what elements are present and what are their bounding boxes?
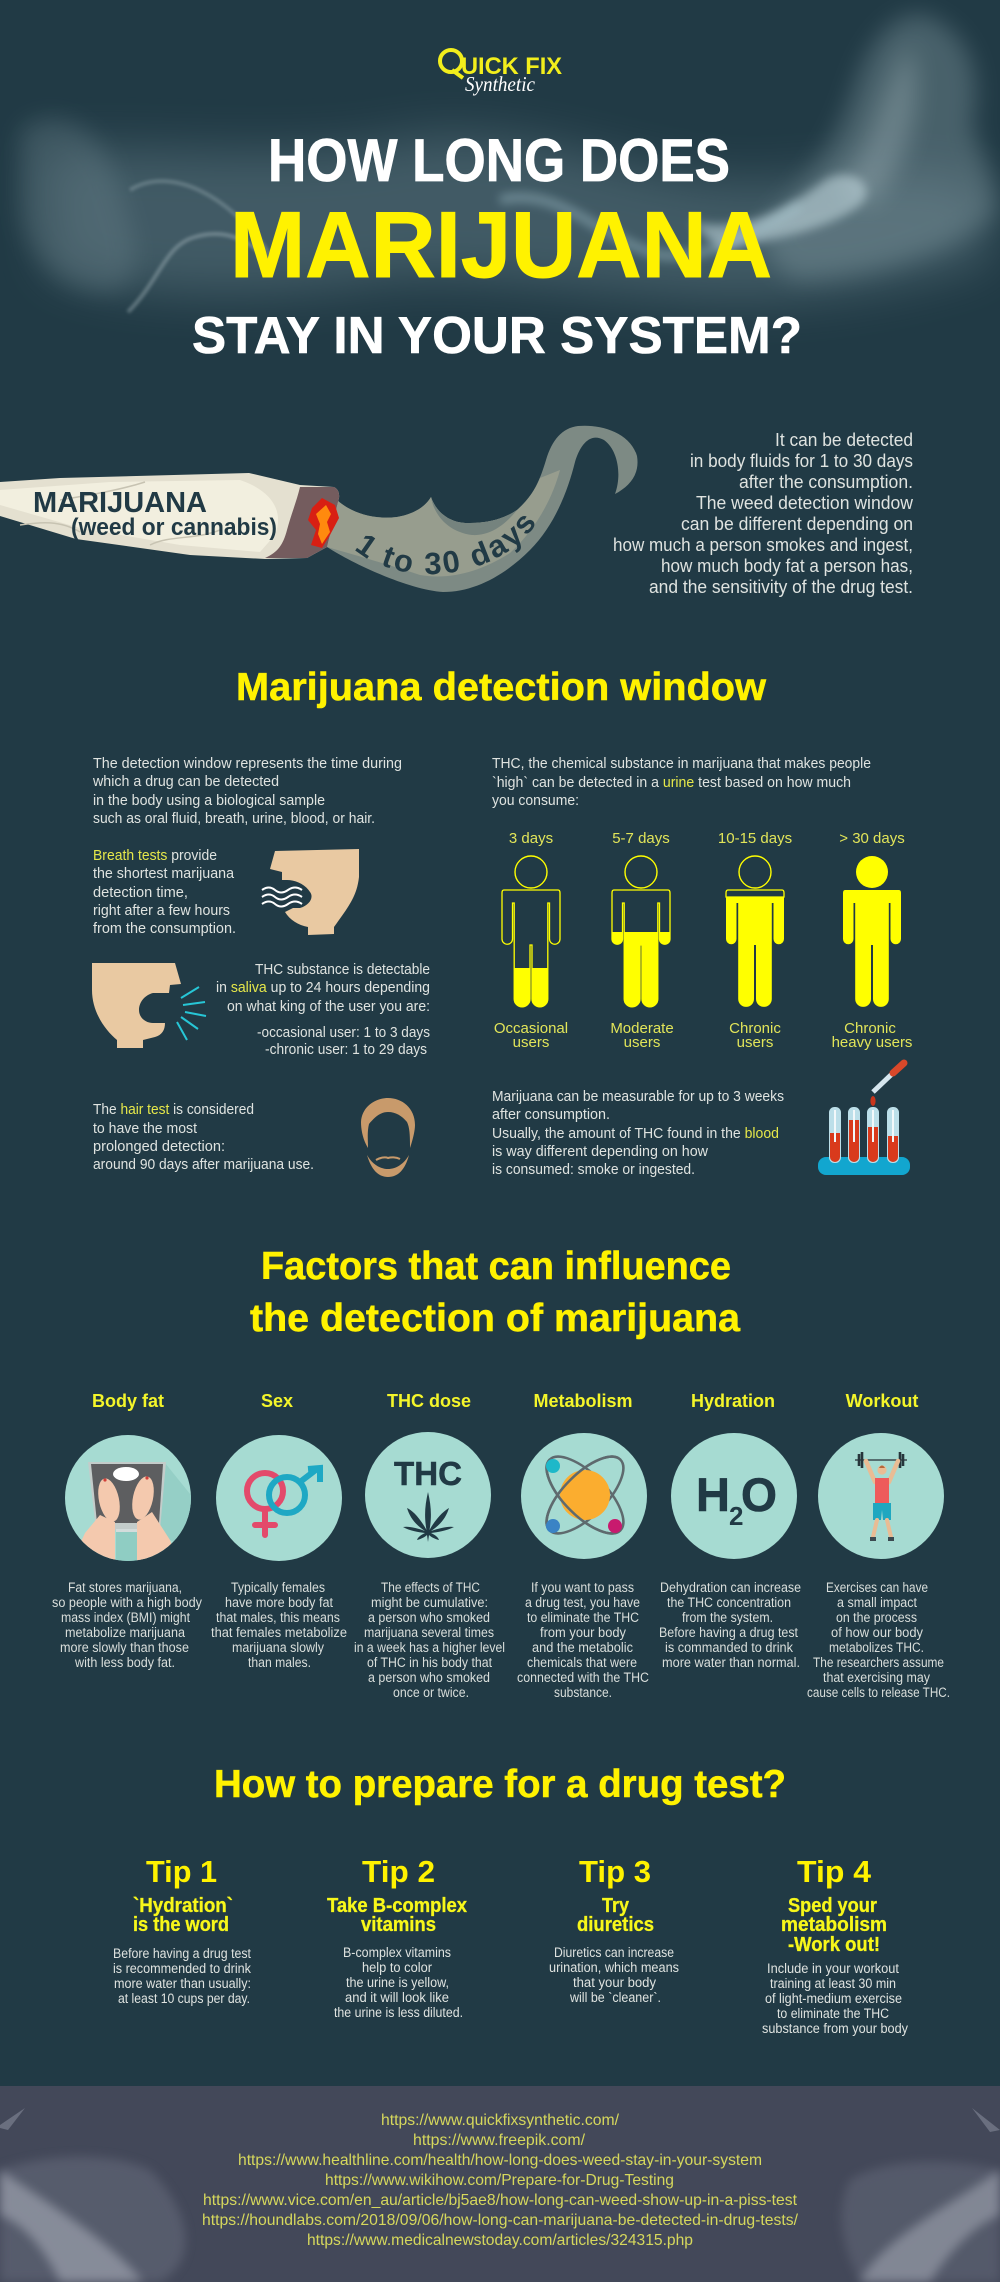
icon: THC leaf: THC bbox=[394, 1455, 462, 1492]
factor: metabolism: from your body bbox=[540, 1625, 626, 1640]
text: blood test: Usually, the amount of THC found in the blood bbox=[492, 1125, 779, 1142]
text: breath tests: the shortest marijuana bbox=[93, 865, 235, 882]
title: STAY IN YOUR SYSTEM? bbox=[192, 307, 802, 365]
urine figures: chronic heavy users bbox=[832, 830, 912, 1051]
text: hair test bbox=[93, 1101, 314, 1173]
tip 3: Diuretics can increase bbox=[554, 1945, 674, 1960]
intro paragraph: and the sensitivity of the drug test. bbox=[649, 577, 913, 597]
tip 2: and it will look like bbox=[345, 1990, 449, 2005]
tip 4: Sped your bbox=[788, 1895, 877, 1917]
tip 4: -Work out! bbox=[788, 1934, 880, 1956]
factor: sex bbox=[211, 1391, 347, 1670]
text: detection window definition bbox=[92, 755, 402, 827]
icon: atom bbox=[521, 1433, 647, 1559]
text: urine intro: you consume: bbox=[492, 792, 579, 809]
icon: H2O: 2 bbox=[729, 1501, 743, 1531]
urine figures: occasional users: Occasional bbox=[494, 1020, 568, 1037]
title: HOW LONG DOES bbox=[268, 127, 730, 194]
factor: workout: metabolizes THC. bbox=[829, 1640, 924, 1655]
urine figures: moderate users: users bbox=[624, 1034, 660, 1051]
heading: detection window: Marijuana detection window bbox=[236, 666, 767, 709]
urine figures: occasional users: 3 days bbox=[509, 830, 553, 847]
factor: THC dose: might be cumulative: bbox=[371, 1595, 488, 1610]
text: detection window definition: such as oral fluid, breath, urine, blood, or hair. bbox=[93, 810, 375, 827]
tip 1: is the word bbox=[133, 1914, 229, 1936]
tip 4: of light-medium exercise bbox=[765, 1991, 902, 2006]
tip 1 bbox=[113, 1854, 251, 2006]
factor: workout: on the process bbox=[836, 1610, 917, 1625]
factor: THC dose: in a week has a higher level bbox=[354, 1640, 505, 1655]
urine figures: occasional users: users bbox=[513, 1034, 549, 1051]
logo: Quick Fix Synthetic bbox=[440, 50, 562, 96]
text: blood test: is way different depending on how bbox=[492, 1143, 708, 1160]
text: saliva: on what king of the user you are: bbox=[227, 998, 430, 1015]
tip 1: more water than usually: bbox=[114, 1976, 251, 1991]
heading: factors: Factors that can influence bbox=[261, 1245, 731, 1288]
factor: metabolism: connected with the THC bbox=[517, 1670, 649, 1685]
urine figures: chronic users: users bbox=[737, 1034, 773, 1051]
source links: https://www.vice.com/en_au/article/bj5ae8/how-long-can-weed-show-up-in-a-piss-test bbox=[203, 2192, 798, 2209]
urine figures: chronic heavy users: > 30 days bbox=[839, 830, 905, 847]
factor: body fat: so people with a high body bbox=[52, 1595, 202, 1610]
urine figures: occasional users bbox=[494, 830, 568, 1051]
logo: Quick Fix Synthetic: UICK FIX bbox=[461, 53, 562, 80]
factor: metabolism: chemicals that were bbox=[527, 1655, 637, 1670]
tip 4: to eliminate the THC bbox=[777, 2006, 889, 2021]
factor: THC dose: a person who smoked bbox=[368, 1610, 490, 1625]
factor: hydration: the THC concentration bbox=[667, 1595, 791, 1610]
smoke ribbon with 1 to 30 days: 1 to 30 days bbox=[355, 516, 534, 574]
factor: metabolism: to eliminate the THC bbox=[527, 1610, 639, 1625]
text: saliva: -occasional user: 1 to 3 days bbox=[257, 1024, 430, 1041]
factor: sex: than males. bbox=[248, 1655, 311, 1670]
intro paragraph: It can be detected bbox=[775, 430, 913, 450]
tip 1: is recommended to drink bbox=[113, 1961, 251, 1976]
tip 3: Tip 3 bbox=[579, 1854, 651, 1889]
text: breath tests: Breath tests provide bbox=[93, 847, 217, 864]
text: detection window definition: which a drug can be detected bbox=[92, 773, 279, 790]
text: breath tests: from the consumption. bbox=[93, 920, 236, 937]
factor: THC dose: a person who smoked bbox=[368, 1670, 490, 1685]
factor: workout: The researchers assume bbox=[813, 1655, 944, 1670]
factor: THC dose: once or twice. bbox=[393, 1685, 469, 1700]
intro paragraph: in body fluids for 1 to 30 days bbox=[690, 451, 913, 471]
text: urine intro: `high` can be detected in a urine test based on how much bbox=[492, 774, 851, 791]
tip 3: diuretics bbox=[577, 1914, 654, 1936]
factor: workout: a small impact bbox=[837, 1595, 917, 1610]
factor: hydration: Before having a drug test bbox=[659, 1625, 798, 1640]
text: hair test: The hair test is considered bbox=[93, 1101, 254, 1118]
factor: THC dose: The effects of THC bbox=[381, 1580, 480, 1595]
icon: H2O bbox=[671, 1433, 797, 1559]
source links: https://www.wikihow.com/Prepare-for-Drug-Testing bbox=[325, 2172, 674, 2189]
text: detection window definition: in the body using a biological sample bbox=[93, 792, 325, 809]
title: MARIJUANA bbox=[230, 192, 772, 297]
tip 3: urination, which means bbox=[549, 1960, 679, 1975]
text: detection window definition: The detection window represents the time during bbox=[93, 755, 402, 772]
text: hair test: prolonged detection: bbox=[93, 1138, 225, 1155]
heading: how to prepare: How to prepare for a drug test? bbox=[214, 1763, 786, 1806]
icon: weightlifter bbox=[818, 1433, 944, 1559]
footer band with smoke bbox=[0, 2086, 1000, 2282]
source links: https://www.quickfixsynthetic.com/ bbox=[381, 2112, 620, 2129]
tip 1: Tip 1 bbox=[146, 1854, 217, 1889]
factor: body fat: Body fat bbox=[92, 1391, 164, 1411]
intro paragraph: how much a person smokes and ingest, bbox=[613, 535, 913, 555]
factor: body fat bbox=[52, 1391, 202, 1670]
text: blood test: after consumption. bbox=[492, 1106, 610, 1123]
tip 4: metabolism bbox=[781, 1914, 887, 1936]
tip 1: at least 10 cups per day. bbox=[118, 1991, 250, 2006]
factor: metabolism bbox=[517, 1391, 649, 1700]
tip 2: Take B-complex bbox=[327, 1895, 467, 1917]
tip 2: the urine is less diluted. bbox=[334, 2005, 463, 2020]
intro paragraph bbox=[613, 430, 914, 597]
factor: body fat: Fat stores marijuana, bbox=[68, 1580, 182, 1595]
urine figures: chronic users: Chronic bbox=[729, 1020, 781, 1037]
text: breath tests: detection time, bbox=[93, 884, 188, 901]
source links: https://www.freepik.com/ bbox=[413, 2132, 586, 2149]
intro paragraph: after the consumption. bbox=[739, 472, 913, 492]
factor: workout bbox=[807, 1391, 950, 1700]
factor: sex: marijuana slowly bbox=[232, 1640, 324, 1655]
urine figures: chronic users bbox=[718, 830, 792, 1051]
tip 4: Include in your workout bbox=[767, 1961, 899, 1976]
smoke ribbon with 1 to 30 days bbox=[327, 426, 638, 592]
source links: https://houndlabs.com/2018/09/06/how-long-can-marijuana-be-detected-in-drug-tests/ bbox=[202, 2212, 799, 2229]
factor: body fat: with less body fat. bbox=[74, 1655, 175, 1670]
smoke background bbox=[20, 14, 996, 312]
text: saliva bbox=[216, 961, 430, 1058]
icon: blood test tubes bbox=[818, 1063, 910, 1175]
icon: breath from mouth bbox=[262, 849, 359, 935]
factor: sex: have more body fat bbox=[225, 1595, 333, 1610]
tip 2: the urine is yellow, bbox=[346, 1975, 449, 1990]
factor: workout: cause cells to release THC. bbox=[807, 1685, 950, 1700]
factor: THC dose: marijuana several times bbox=[364, 1625, 494, 1640]
factor: metabolism: substance. bbox=[554, 1685, 612, 1700]
factor: hydration bbox=[659, 1391, 801, 1670]
text: saliva: -chronic user: 1 to 29 days bbox=[265, 1041, 427, 1058]
factor: body fat: metabolize marijuana bbox=[65, 1625, 185, 1640]
factor: metabolism: Metabolism bbox=[533, 1391, 633, 1411]
text: hair test: around 90 days after marijuana use. bbox=[93, 1156, 314, 1173]
text: blood test: is consumed: smoke or ingested. bbox=[492, 1161, 695, 1178]
text: urine intro bbox=[492, 755, 871, 809]
icon: H2O: H bbox=[696, 1468, 730, 1521]
urine figures: moderate users: 5-7 days bbox=[612, 830, 670, 847]
factor: workout: Workout bbox=[846, 1391, 918, 1411]
factor: sex: Typically females bbox=[231, 1580, 325, 1595]
factor: metabolism: a drug test, you have bbox=[525, 1595, 640, 1610]
icon: feet on scale bbox=[65, 1435, 195, 1565]
factor: hydration: more water than normal. bbox=[662, 1655, 800, 1670]
marijuana joint with label: (weed or cannabis) bbox=[71, 514, 277, 541]
factor: body fat: mass index (BMI) might bbox=[61, 1610, 190, 1625]
factor: body fat: more slowly than those bbox=[60, 1640, 189, 1655]
text: breath tests bbox=[93, 847, 236, 937]
factor: hydration: Dehydration can increase bbox=[660, 1580, 801, 1595]
logo: Quick Fix Synthetic: Synthetic bbox=[465, 72, 536, 96]
text: urine intro: THC, the chemical substance in marijuana that makes people bbox=[492, 755, 871, 772]
factor: hydration: from the system. bbox=[682, 1610, 773, 1625]
intro paragraph: The weed detection window bbox=[696, 493, 914, 513]
tip 3: will be `cleaner`. bbox=[569, 1990, 661, 2005]
icon: saliva from mouth bbox=[92, 963, 206, 1048]
tip 2 bbox=[327, 1854, 467, 2020]
tip 4: training at least 30 min bbox=[770, 1976, 896, 1991]
factor: metabolism: If you want to pass bbox=[531, 1580, 634, 1595]
text: blood test: Marijuana can be measurable for up to 3 weeks bbox=[492, 1088, 784, 1105]
factor: sex: that males, this means bbox=[216, 1610, 340, 1625]
tip 2: B-complex vitamins bbox=[343, 1945, 451, 1960]
urine figures: chronic heavy users: Chronic bbox=[844, 1020, 896, 1037]
source links bbox=[202, 2112, 799, 2249]
factor: THC dose bbox=[354, 1391, 505, 1700]
tip 4 bbox=[762, 1854, 908, 2036]
text: breath tests: right after a few hours bbox=[93, 902, 230, 919]
source links: https://www.medicalnewstoday.com/articles/324315.php bbox=[307, 2232, 693, 2249]
tip 4: substance from your body bbox=[762, 2021, 908, 2036]
heading: factors bbox=[250, 1245, 740, 1340]
factor: hydration: is commanded to drink bbox=[665, 1640, 793, 1655]
urine figures: chronic users: 10-15 days bbox=[718, 830, 792, 847]
text: saliva: in saliva up to 24 hours depending bbox=[216, 979, 430, 996]
factor: workout: of how our body bbox=[831, 1625, 923, 1640]
factor: THC dose: THC dose bbox=[387, 1391, 471, 1411]
urine figures: chronic heavy users: heavy users bbox=[832, 1034, 912, 1051]
text: saliva: THC substance is detectable bbox=[255, 961, 430, 978]
tip 1: Before having a drug test bbox=[113, 1946, 251, 1961]
urine figures: moderate users: Moderate bbox=[610, 1020, 674, 1037]
factor: sex: Sex bbox=[261, 1391, 293, 1411]
marijuana joint with label bbox=[0, 473, 339, 559]
tip 3 bbox=[549, 1854, 679, 2005]
heading: factors: the detection of marijuana bbox=[250, 1297, 740, 1340]
factor: workout: Exercises can have bbox=[826, 1580, 928, 1595]
title bbox=[192, 127, 802, 365]
factor: workout: that exercising may bbox=[823, 1670, 930, 1685]
tip 2: help to color bbox=[362, 1960, 432, 1975]
source links: https://www.healthline.com/health/how-long-does-weed-stay-in-your-system bbox=[238, 2152, 762, 2169]
factor: metabolism: and the metabolic bbox=[532, 1640, 633, 1655]
icon: gender symbols bbox=[216, 1435, 342, 1561]
icon: hair and beard bbox=[361, 1098, 415, 1177]
factor: sex: that females metabolize bbox=[211, 1625, 347, 1640]
icon: THC leaf bbox=[365, 1432, 491, 1558]
tip 3: Try bbox=[602, 1895, 630, 1917]
factor: hydration: Hydration bbox=[691, 1391, 775, 1411]
factor: THC dose: of THC in his body that bbox=[367, 1655, 492, 1670]
tip 2: vitamins bbox=[361, 1914, 436, 1936]
marijuana joint with label: MARIJUANA bbox=[33, 487, 207, 519]
tip 3: that your body bbox=[573, 1975, 656, 1990]
intro paragraph: how much body fat a person has, bbox=[661, 556, 913, 576]
urine figures: moderate users bbox=[610, 830, 674, 1051]
intro paragraph: can be different depending on bbox=[681, 514, 913, 534]
text: blood test bbox=[492, 1088, 784, 1178]
text: hair test: to have the most bbox=[93, 1120, 198, 1137]
tip 4: Tip 4 bbox=[797, 1854, 872, 1889]
tip 2: Tip 2 bbox=[362, 1854, 435, 1889]
tip 1: `Hydration` bbox=[133, 1895, 233, 1917]
icon: H2O: O bbox=[741, 1468, 777, 1521]
